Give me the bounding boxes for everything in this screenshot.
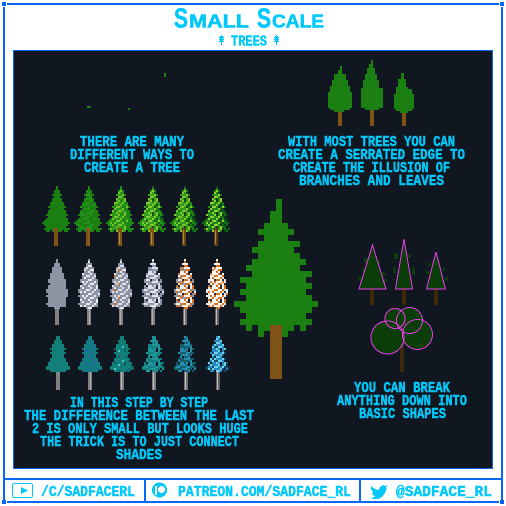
panel: dark canvas: [14, 50, 492, 468]
text: basic shapes: ANYTHING DOWN INTO: [337, 393, 467, 410]
snowy tree 6: [206, 259, 228, 325]
green tree 1: [42, 186, 70, 246]
title: [174, 2, 324, 34]
subtitle: TREES: [231, 34, 267, 50]
footer: youtube: /C/SADFACERL: [41, 484, 135, 501]
big pixel tree: [234, 199, 318, 379]
triangle tree 2: [393, 239, 415, 305]
teal tree 3: [110, 336, 134, 390]
icon: right tree glyph: [274, 35, 279, 45]
text: step by step explanation: IN THIS STEP BY STEP: [70, 395, 208, 412]
green tree 2: [74, 186, 102, 246]
text: serrated edge: [278, 134, 465, 190]
triangle tree 1: [358, 245, 387, 305]
green tree step row: [42, 186, 230, 246]
text: step by step explanation: THE TRICK IS TO JUST CONNECT: [40, 434, 239, 451]
green tree 4: [138, 186, 166, 246]
snowy tree 3: [110, 259, 132, 325]
title: MALL: [189, 10, 249, 32]
icon: patreon logo: [152, 482, 167, 498]
snowy tree 4: [142, 259, 164, 325]
footer: twitter: @SADFACE_RL: [396, 484, 492, 501]
title: CALE: [272, 10, 324, 32]
text: serrated edge: BRANCHES AND LEAVES: [299, 173, 444, 190]
snowy tree 2: [78, 259, 100, 325]
text: basic shapes: BASIC SHAPES: [359, 406, 446, 423]
three simple trees: [328, 60, 414, 126]
text: many ways to create a tree: DIFFERENT WAYS TO: [70, 147, 194, 164]
text: serrated edge: CREATE A SERRATED EDGE TO: [278, 147, 465, 164]
title: S: [257, 2, 271, 34]
teal tree 5: [174, 336, 198, 390]
green tree 3: [106, 186, 134, 246]
teal tree 6: [206, 336, 230, 390]
snowy tree 5: [174, 259, 196, 325]
icon: twitter bird: [371, 485, 387, 499]
stray pixels: [87, 73, 166, 110]
title: S: [174, 2, 188, 34]
snowy tree 1: [46, 259, 68, 325]
text: many ways to create a tree: THERE ARE MANY: [80, 134, 184, 151]
footer dividers: [5, 478, 501, 501]
text: serrated edge: CREATE THE ILLUSION OF: [293, 160, 450, 177]
teal tree step row: [46, 336, 230, 390]
teal tree 1: [46, 336, 70, 390]
teal tree 2: [78, 336, 102, 390]
text: many ways to create a tree: [70, 134, 194, 177]
text: step by step explanation: [24, 395, 254, 464]
tree B: [361, 60, 383, 126]
footer: patreon: PATREON.COM/SADFACE_RL: [178, 484, 351, 501]
text: many ways to create a tree: CREATE A TREE: [84, 160, 180, 177]
footer: youtube: [12, 484, 135, 501]
green tree 6: [202, 186, 230, 246]
text: step by step explanation: 2 IS ONLY SMALL BUT LOOKS HUGE: [32, 421, 248, 438]
green tree 5: [170, 186, 198, 246]
text: step by step explanation: THE DIFFERENCE BETWEEN THE LAST: [24, 408, 254, 425]
diagram: trees as triangles: [358, 239, 448, 305]
text: serrated edge: WITH MOST TREES YOU CAN: [288, 134, 455, 151]
diagram: round tree as circles: [371, 308, 432, 372]
text: step by step explanation: SHADES: [116, 447, 162, 464]
triangle tree 3: [426, 252, 448, 305]
tree C: [394, 73, 414, 126]
icon: left tree glyph: [219, 35, 224, 45]
teal tree 4: [142, 336, 166, 390]
text: basic shapes: [337, 380, 467, 423]
snowy tree step row: [46, 259, 228, 325]
text: basic shapes: YOU CAN BREAK: [354, 380, 450, 397]
icon: play button: [12, 484, 32, 498]
tree A: [328, 66, 352, 126]
